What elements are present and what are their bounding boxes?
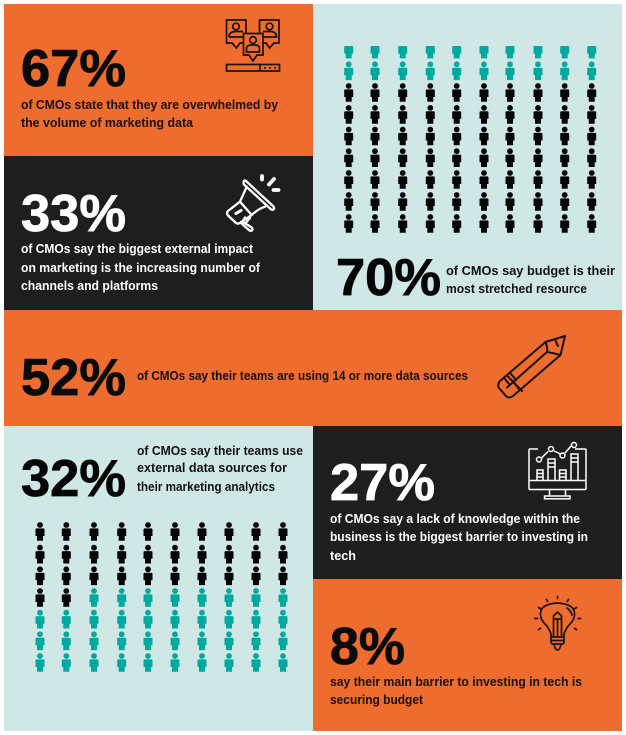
panel: 67% overwhelmed by data [4,4,313,156]
stat: 67%: 67% [21,40,126,98]
rows of black people [344,83,596,233]
text: external impact: channels and platforms [21,279,158,293]
panel: 70% budget [313,4,622,310]
text: securing budget [330,675,582,707]
text: lack of knowledge [330,512,588,563]
panel: 33% channels and platforms [4,156,313,310]
icon: pencil [498,336,565,398]
text: budget: of CMOs say budget is their [446,264,615,278]
panel: 27% lack of knowledge [313,426,622,579]
panel: 8% securing budget [313,579,622,731]
teal people [36,588,288,672]
row of teal torsos [344,46,596,80]
icon: people speech bubbles and bar [226,20,280,71]
text: securing budget: say their main barrier to investing in tech is [330,675,582,689]
text: overwhelmed by data: the volume of marketing data [21,116,194,130]
text: lack of knowledge: tech [330,549,356,563]
black people [36,522,288,607]
text: lack of knowledge: business is the biggest barrier to investing in [330,530,588,544]
stat: 27%: 27% [330,454,435,512]
text: budget: most stretched resource [446,282,587,296]
panel: 32% external data [4,426,313,731]
pictogram: 70 of 100 people in black [344,46,596,233]
text: external data: of CMOs say their teams use [137,444,303,458]
text: overwhelmed by data: of CMOs state that they are overwhelmed by [21,98,278,112]
text: external impact [21,242,261,293]
stat: 8%: 8% [330,618,405,676]
text: budget [446,264,615,296]
text: external impact: of CMOs say the biggest external impact [21,242,254,256]
text: external impact: on marketing is the increasing number of [21,261,261,275]
panel: 52% data sources [4,310,622,426]
text: overwhelmed by data [21,98,278,130]
pictogram: 32 of 70 people in black [36,522,288,672]
text: external data: external data sources for [137,461,287,475]
text: external data [137,444,303,494]
icon: megaphone [227,176,278,231]
icon: light bulb with pencil [535,596,580,650]
stat: 70%: 70% [336,249,441,307]
stat: 33%: 33% [21,185,126,243]
icon: monitor with chart [529,442,586,499]
stat: 52%: 52% [21,349,126,407]
text: securing budget: securing budget [330,693,424,707]
text: data sources: of CMOs say their teams are using 14 or more data sources [137,369,468,383]
text: external data: their marketing analytics [137,480,275,494]
stat: 32%: 32% [21,450,126,508]
text: lack of knowledge: of CMOs say a lack of knowledge within the [330,512,580,526]
